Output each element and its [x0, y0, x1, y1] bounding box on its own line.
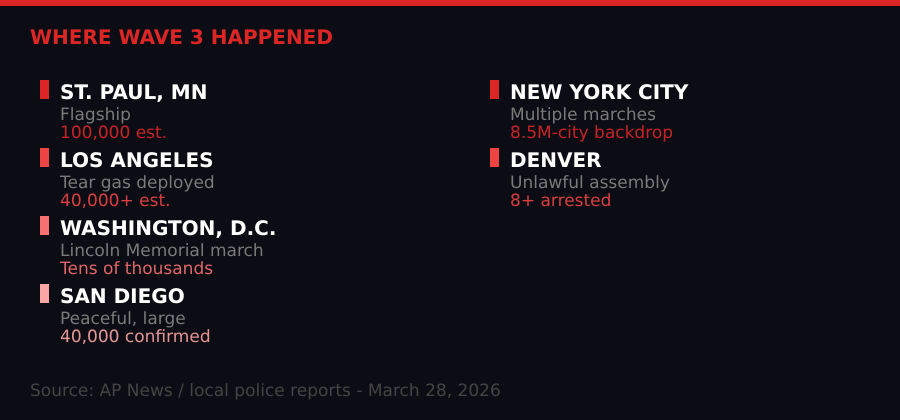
location: San Diego: SAN DIEGO — [60, 284, 185, 308]
marker: San Diego — [40, 284, 49, 303]
top accent bar — [0, 0, 900, 6]
source note: Source: AP News / local police reports - March 28, 2026 — [30, 381, 501, 401]
marker: New York City — [490, 80, 499, 99]
location: New York City: 8.5M-city backdrop — [510, 123, 673, 143]
location: Los Angeles — [40, 148, 215, 211]
location: St. Paul: 100,000 est. — [60, 123, 167, 143]
location: Denver — [490, 148, 670, 211]
location: San Diego — [40, 284, 211, 347]
location: San Diego: Peaceful, large — [60, 309, 186, 329]
location: Los Angeles: 40,000+ est. — [60, 191, 171, 211]
location: New York City — [490, 80, 689, 143]
location: New York City: Multiple marches — [510, 105, 656, 125]
location: Washington: WASHINGTON, D.C. — [60, 216, 276, 240]
location: St. Paul: ST. PAUL, MN — [60, 80, 207, 104]
location: Denver: DENVER — [510, 148, 602, 172]
location: Denver: Unlawful assembly — [510, 173, 670, 193]
marker: Los Angeles — [40, 148, 49, 167]
location: Los Angeles: Tear gas deployed — [59, 173, 215, 193]
location: St. Paul — [40, 80, 207, 143]
location: Washington: Tens of thousands — [59, 259, 213, 279]
location: Los Angeles: LOS ANGELES — [60, 148, 214, 172]
location: St. Paul: Flagship — [60, 105, 131, 125]
marker: Washington — [40, 216, 49, 235]
title: WHERE WAVE 3 HAPPENED — [30, 25, 333, 49]
marker: St. Paul — [40, 80, 49, 99]
location: Denver: 8+ arrested — [510, 191, 611, 211]
location: Washington — [40, 216, 276, 279]
location: Washington: Lincoln Memorial march — [60, 241, 264, 261]
location: New York City: NEW YORK CITY — [510, 80, 689, 104]
location: San Diego: 40,000 confirmed — [60, 327, 211, 347]
marker: Denver — [490, 148, 499, 167]
